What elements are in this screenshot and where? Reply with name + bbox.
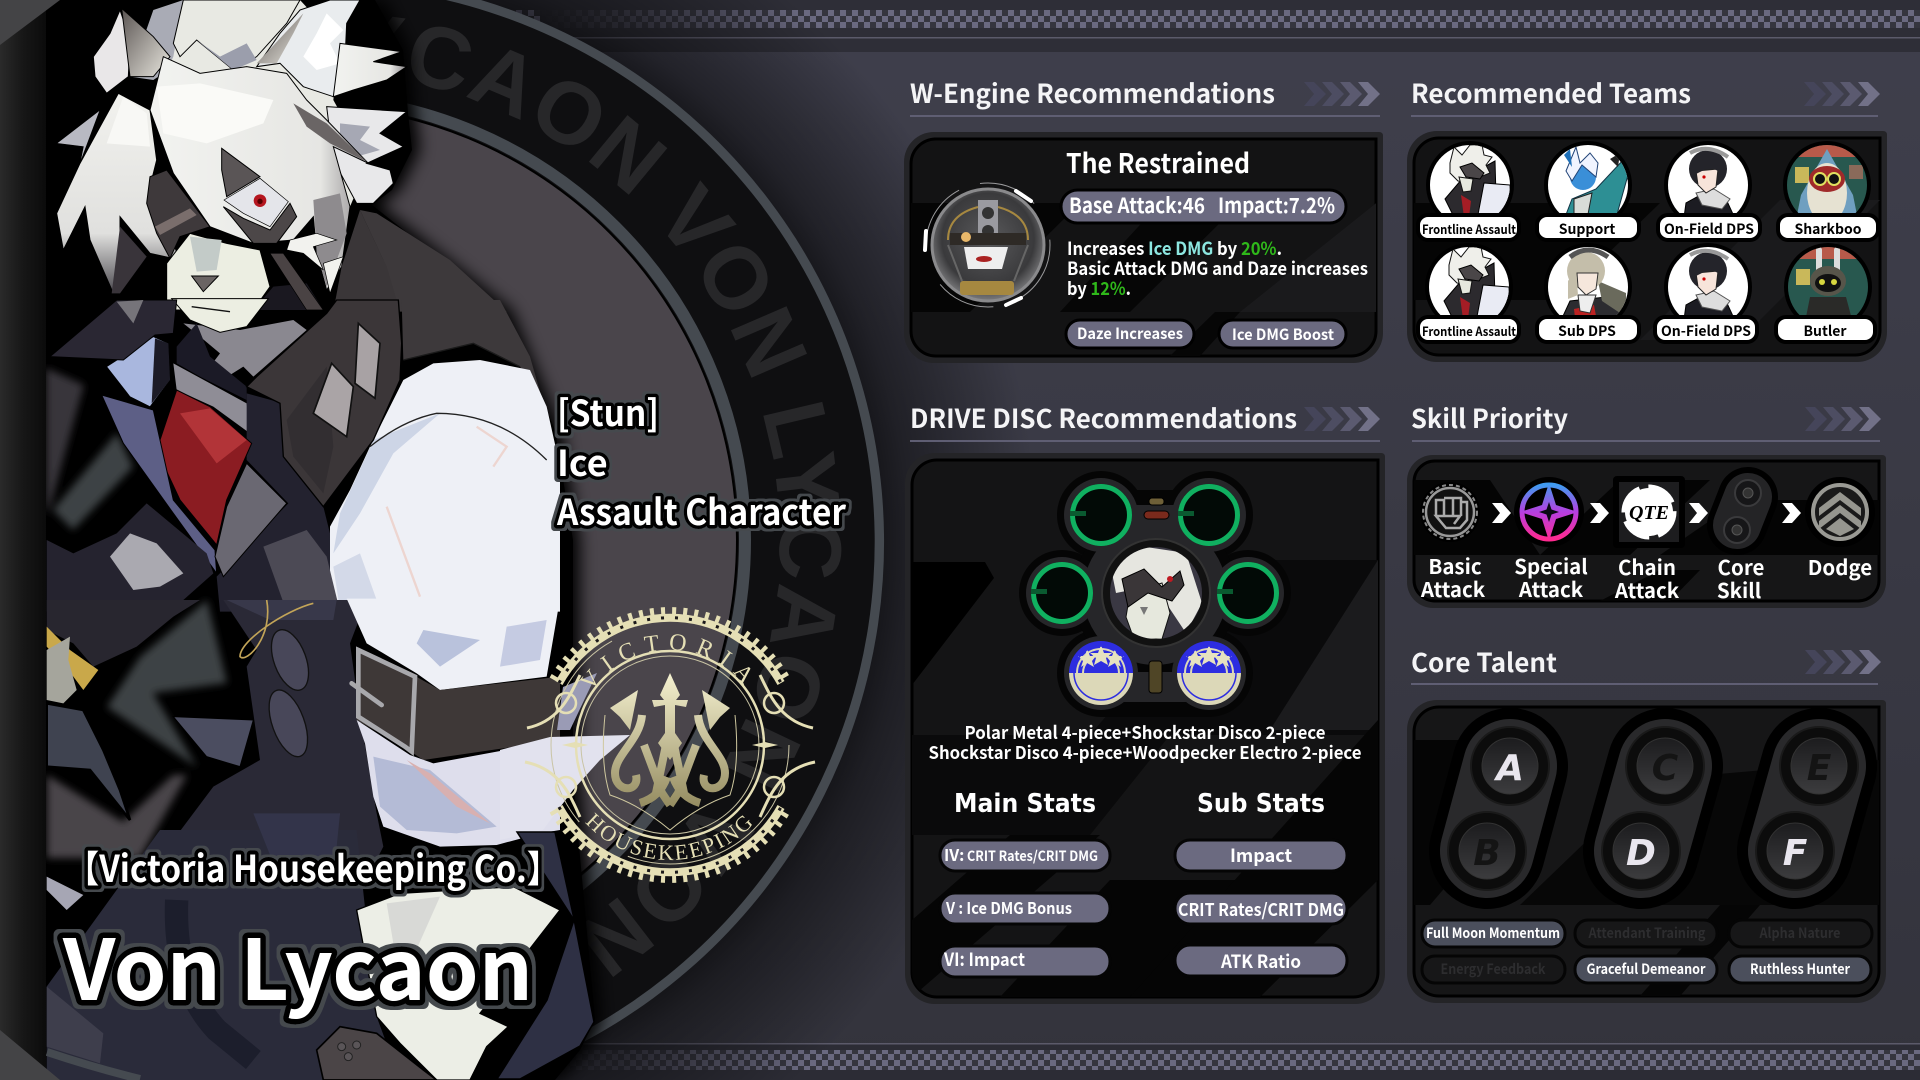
label: Core Skill: Skill bbox=[1717, 574, 1761, 604]
tag: Daze Increases bbox=[1066, 320, 1194, 348]
sub stat: Impact: Impact bbox=[1230, 842, 1292, 868]
talent: Alpha Nature: Alpha Nature bbox=[1759, 923, 1840, 943]
emblem: Victoria Housekeeping: VICTORIA bbox=[578, 634, 750, 686]
icon: W-Engine orb bbox=[926, 183, 1050, 307]
panel: Recommended Teams bbox=[1407, 131, 1887, 362]
main stat: VI: VI: Impact bbox=[943, 946, 1025, 972]
icon: chain attack: QTE bbox=[1629, 502, 1669, 524]
sub stat: ATK Ratio bbox=[1175, 945, 1347, 976]
label: Dodge: Dodge bbox=[1808, 551, 1872, 581]
talent: Graceful Demeanor bbox=[1575, 956, 1717, 983]
label: Chain Attack bbox=[1614, 551, 1680, 604]
main stat: VI bbox=[940, 946, 1110, 977]
heading: Main Stats: Main Stats bbox=[954, 789, 1096, 819]
label: Sharkboo bbox=[1778, 215, 1878, 240]
blue disc 2 bbox=[1177, 641, 1241, 705]
icon: core skill bbox=[1724, 480, 1761, 543]
tag: Daze Increases: Daze Increases bbox=[1077, 322, 1183, 344]
main stat: IV: IV: bbox=[944, 842, 964, 866]
label: Frontline Assault bbox=[1418, 215, 1519, 240]
emblem: Victoria Housekeeping: HOUSEKEEPING bbox=[585, 812, 752, 860]
talent: Full Moon Momentum bbox=[1422, 920, 1565, 947]
talent capsule A B: A bbox=[1493, 748, 1524, 789]
drive disc wheel bbox=[1019, 471, 1291, 717]
label: Special Attack: Special bbox=[1514, 550, 1588, 580]
portrait: Butler bbox=[1784, 243, 1872, 315]
portrait: centre disc bbox=[1102, 539, 1210, 647]
panel: Drive Disc bbox=[905, 453, 1385, 1004]
main stat: IV: CRIT Rates/CRIT DMG bbox=[967, 846, 1098, 866]
arrow bbox=[1782, 503, 1801, 523]
tag: Ice: Ice bbox=[557, 435, 608, 487]
talent: Alpha Nature bbox=[1729, 920, 1872, 947]
stat pill: Impact:7.2% bbox=[1218, 190, 1335, 220]
tag: Stun: [Stun] bbox=[557, 385, 659, 437]
talent: Attendant Training bbox=[1575, 920, 1717, 947]
label: On-Field DPS: On-Field DPS bbox=[1664, 219, 1754, 239]
talent: Energy Feedback: Energy Feedback bbox=[1440, 959, 1546, 979]
label: Support: Support bbox=[1559, 219, 1615, 239]
panel: Core Talent bbox=[1407, 700, 1886, 1003]
sub stat: ATK Ratio: ATK Ratio bbox=[1220, 948, 1301, 974]
icon: dodge bbox=[1805, 477, 1875, 547]
heading: Recommended Teams: Recommended Teams bbox=[1411, 74, 1691, 111]
talent capsule A B bbox=[1448, 727, 1549, 890]
heading: Skill Priority bbox=[1411, 399, 1881, 442]
arrow bbox=[1590, 503, 1609, 523]
label: Frontline Assault: Frontline Assault bbox=[1422, 219, 1517, 238]
tag: Assault Character: Assault Character bbox=[556, 484, 846, 536]
talent capsule E F: F bbox=[1783, 833, 1808, 874]
sub stat: Impact bbox=[1175, 840, 1347, 871]
label: On-Field DPS second: On-Field DPS bbox=[1661, 321, 1751, 341]
portrait: Lycaon bbox=[1426, 141, 1514, 213]
label: Special Attack bbox=[1514, 550, 1588, 603]
heading: Sub Stats: Sub Stats bbox=[1197, 789, 1325, 819]
circular badge behind character: LYCAON VON LYCAON VON LYCAON bbox=[391, 17, 842, 977]
engine description: by 12%. bbox=[1067, 275, 1131, 301]
portrait: Soukaku bbox=[1544, 141, 1632, 213]
heading: Recommended Teams bbox=[1411, 74, 1880, 117]
glowing orb marks bbox=[925, 191, 1031, 305]
torso and sleeve bbox=[47, 299, 560, 612]
portrait: Lycaon second bbox=[1427, 247, 1511, 315]
portrait: Ellen bbox=[1664, 141, 1752, 213]
head and hair bbox=[57, 0, 407, 310]
waist and belt bbox=[47, 599, 560, 910]
label: Basic Attack bbox=[1420, 550, 1486, 603]
label: Core Skill: Core bbox=[1718, 551, 1765, 581]
shadow patches bbox=[46, 368, 227, 858]
portrait: Sharkboo bbox=[1783, 141, 1871, 213]
label: Chain Attack: Chain bbox=[1618, 551, 1676, 581]
icon: chain attack bbox=[1613, 476, 1685, 548]
label: Butler: Butler bbox=[1804, 321, 1847, 341]
green disc 1 bbox=[1070, 484, 1132, 546]
main stat: IV bbox=[940, 840, 1110, 871]
shadow halo bbox=[46, 0, 602, 1080]
heading: Core Talent bbox=[1411, 643, 1881, 685]
character tags bbox=[556, 385, 846, 536]
talent capsule C D: D bbox=[1626, 833, 1656, 874]
panel: Skill Priority bbox=[1407, 455, 1886, 608]
right trouser bbox=[497, 832, 594, 1079]
talent capsule C D bbox=[1602, 727, 1704, 890]
label: Sub DPS: Sub DPS bbox=[1558, 321, 1616, 341]
character illustration bbox=[46, 0, 630, 1080]
main stat: V: V : Ice DMG Bonus bbox=[945, 895, 1072, 919]
character name: Von Lycaon bbox=[62, 904, 533, 1025]
faction name: 【Victoria Housekeeping Co.】 bbox=[66, 839, 560, 893]
engine description: Increases Ice DMG by 20%. bbox=[1067, 235, 1282, 261]
label: Sub DPS bbox=[1537, 317, 1639, 342]
label: Chain Attack: Attack bbox=[1614, 574, 1680, 604]
tag: Ice DMG Boost bbox=[1219, 320, 1346, 348]
blue disc 1 bbox=[1069, 641, 1133, 705]
label: Support bbox=[1537, 215, 1639, 240]
green disc 4 bbox=[1217, 562, 1279, 624]
heading: Skill Priority: Skill Priority bbox=[1411, 399, 1568, 436]
talent capsule E F bbox=[1756, 727, 1858, 890]
heading: Core Talent: Core Talent bbox=[1411, 643, 1557, 680]
label: Basic Attack: Attack bbox=[1420, 573, 1486, 603]
talent: Graceful Demeanor: Graceful Demeanor bbox=[1586, 959, 1706, 979]
talent capsule A B: B bbox=[1473, 833, 1501, 874]
lower ring overlap bbox=[47, 1052, 140, 1079]
arrow bbox=[1689, 503, 1708, 523]
talent: Full Moon Momentum: Full Moon Momentum bbox=[1426, 923, 1560, 943]
left edge bar bbox=[0, 0, 60, 1080]
driver latch bbox=[1144, 498, 1169, 693]
heading: DRIVE DISC Recommendations: DRIVE DISC Recommendations bbox=[910, 399, 1297, 436]
talent capsule C D: C bbox=[1652, 748, 1679, 789]
stat pill bbox=[1061, 190, 1346, 223]
engine description bbox=[1067, 235, 1368, 301]
shoulder and vest bbox=[333, 210, 507, 312]
label: Sharkboo: Sharkboo bbox=[1794, 219, 1862, 239]
label: Core Skill bbox=[1717, 551, 1765, 604]
icon: special attack bbox=[1514, 477, 1584, 547]
heading: W-Engine Recommendations: W-Engine Recommendations bbox=[910, 74, 1275, 111]
cuff tip bbox=[500, 673, 630, 840]
stat pill: Base Attack:46 bbox=[1069, 190, 1205, 220]
emblem: Victoria Housekeeping bbox=[524, 607, 816, 883]
drive disc set text: Polar Metal 4-piece+Shockstar Disco 2-piece bbox=[964, 720, 1326, 745]
portrait: sub DPS maid bbox=[1546, 247, 1632, 315]
heading: W-Engine Recommendations bbox=[910, 74, 1380, 117]
legs bbox=[47, 813, 560, 1080]
talent: Energy Feedback bbox=[1422, 956, 1565, 983]
label: Frontline Assault second bbox=[1418, 317, 1519, 342]
portrait: Ellen second bbox=[1664, 243, 1752, 315]
arrow bbox=[1492, 503, 1511, 523]
engine description: Basic Attack DMG and Daze increases bbox=[1067, 255, 1368, 281]
drive disc set text: Shockstar Disco 4-piece+Woodpecker Electro 2-piece bbox=[928, 740, 1362, 765]
engine name: The Restrained bbox=[1066, 142, 1250, 181]
talent: Ruthless Hunter: Ruthless Hunter bbox=[1750, 959, 1851, 979]
icon: basic attack bbox=[1420, 482, 1480, 542]
sub stat: CRIT: CRIT Rates/CRIT DMG bbox=[1178, 897, 1344, 922]
label: Special Attack: Attack bbox=[1518, 573, 1584, 603]
label: Butler bbox=[1776, 317, 1875, 342]
drive disc set text bbox=[928, 720, 1362, 765]
label: Frontline Assault second: Frontline Assault bbox=[1422, 321, 1517, 340]
main stat: V bbox=[940, 893, 1110, 924]
tag: Ice DMG Boost: Ice DMG Boost bbox=[1232, 323, 1334, 345]
green disc 2 bbox=[1178, 484, 1240, 546]
talent: Ruthless Hunter bbox=[1729, 956, 1871, 983]
talent: Attendant Training: Attendant Training bbox=[1588, 923, 1706, 943]
panel: W-Engine bbox=[904, 132, 1383, 363]
green disc 3 bbox=[1031, 562, 1093, 624]
talent capsule E F: E bbox=[1807, 748, 1832, 789]
label: Basic Attack: Basic bbox=[1428, 550, 1482, 580]
